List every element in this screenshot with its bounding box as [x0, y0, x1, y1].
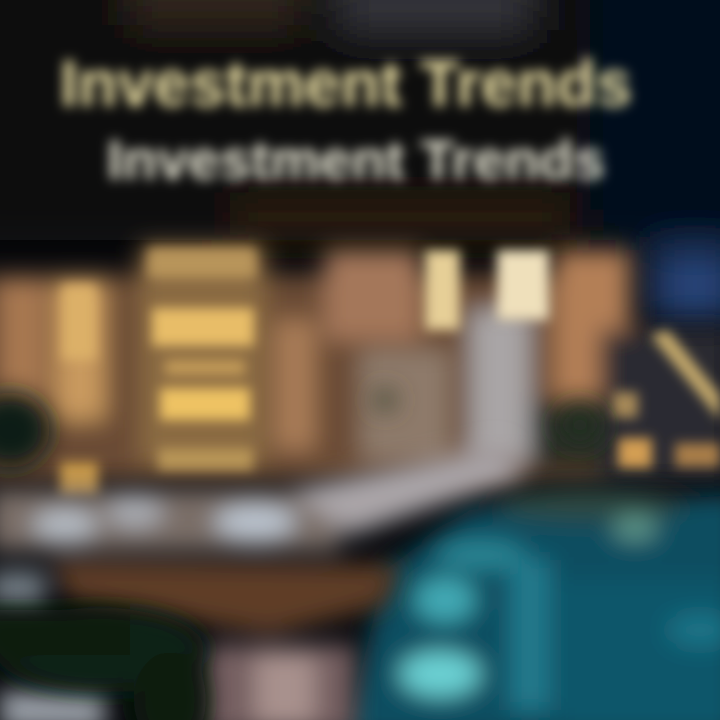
- night sky background: [0, 0, 720, 320]
- terrace and lounge chairs: [0, 445, 525, 720]
- resort building: [0, 245, 720, 480]
- pool water: [345, 489, 720, 720]
- title line 1: Investment Trends: [60, 46, 632, 120]
- glowing windows and floors: [60, 248, 720, 497]
- title: Investment Trends: [60, 46, 632, 191]
- foliage: [0, 388, 604, 720]
- title line 2: Investment Trends: [107, 128, 605, 191]
